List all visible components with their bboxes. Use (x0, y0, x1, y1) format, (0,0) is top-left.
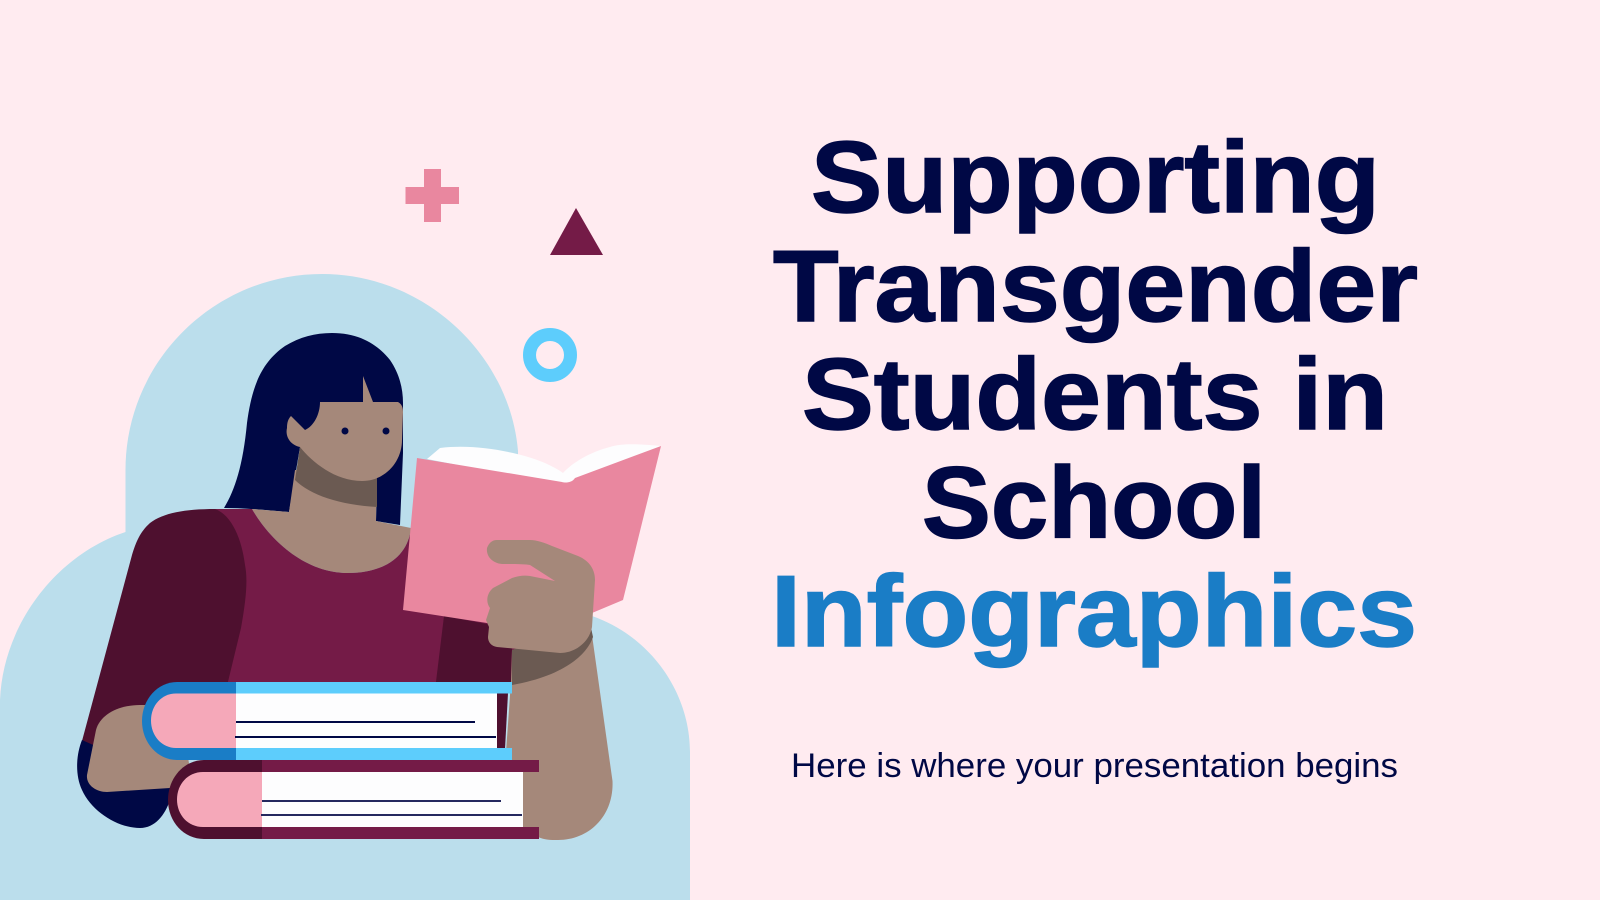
blue cloud backdrop (0, 274, 690, 900)
top book (142, 682, 512, 760)
neck and chest (252, 470, 411, 573)
torso shirt (210, 509, 520, 690)
subtitle: Here is where your presentation begins (791, 747, 1398, 785)
hair back (224, 333, 403, 525)
title (771, 122, 1418, 668)
open book cover (403, 446, 661, 623)
illustration: woman reading (77, 333, 661, 840)
right arm (500, 628, 613, 840)
arm shadow (512, 623, 593, 685)
bottom book (168, 760, 539, 839)
icon: triangle (550, 208, 603, 255)
open book pages (427, 444, 661, 485)
title: School (922, 448, 1266, 560)
icon: ring (530, 334, 570, 376)
title: Infographics (771, 556, 1417, 668)
neck shadow (295, 447, 377, 507)
book stack (142, 682, 539, 839)
title: Supporting (811, 122, 1380, 234)
icon: plus (406, 169, 459, 222)
left hand (87, 705, 190, 792)
shirt shadow right (435, 616, 512, 690)
title: Students in (802, 339, 1388, 451)
hair ends (77, 740, 172, 828)
right hand (486, 540, 595, 653)
left sleeve (82, 509, 246, 760)
title: Transgender (773, 231, 1418, 343)
face (287, 376, 403, 481)
top book back shirt gap (497, 693, 508, 749)
eyes (342, 428, 390, 434)
